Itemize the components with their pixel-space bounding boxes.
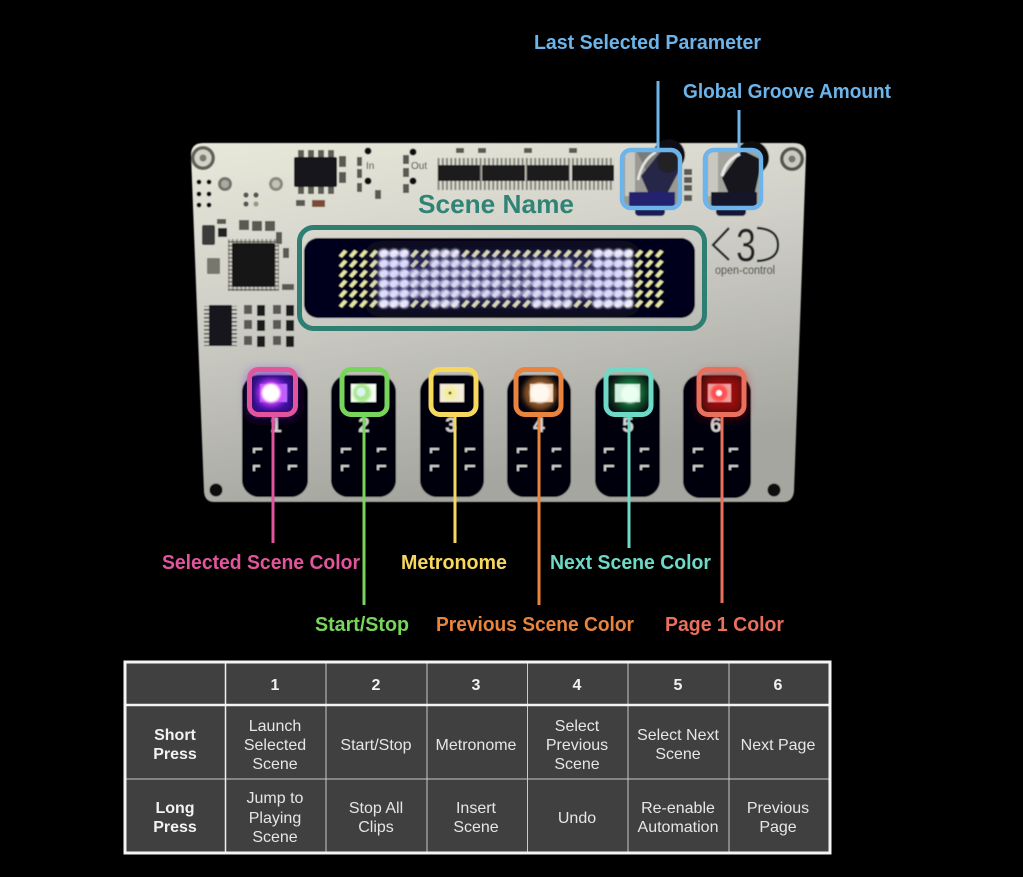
silkscreen labels [366,161,427,172]
label: Previous Scene Color: Previous Scene Color [436,614,634,636]
RGB LEDs [250,373,744,415]
silkscreen labels: In [366,161,374,172]
logo: open-control [713,219,778,277]
circuit board [191,139,806,502]
table row: long press: Automation [638,819,718,836]
table row: short press: Metronome [436,737,517,754]
table row: long press: Scene [453,819,499,836]
table row: short press: Short [154,727,197,744]
label: Next Scene Color: Next Scene Color [550,552,711,574]
button numbers: 3 [445,414,457,437]
table background [125,662,830,853]
logo: open-control: open-control [715,265,775,277]
button numbers: 5 [622,414,634,437]
table grid [125,662,830,853]
highlight: scene name display box [300,228,704,328]
board body [191,143,806,502]
table row: short press: Next Page [741,737,815,754]
callout: button 6 [699,370,744,603]
table row: short press: Launch [249,718,301,735]
button pads [242,375,751,498]
callout: button 3 [431,370,476,543]
label: Last Selected Parameter: Last Selected Parameter [534,32,761,54]
mounting screws and holes [191,146,804,496]
silkscreen labels: Out [411,161,427,172]
table header row: 2 [372,677,381,694]
rotary encoders [622,139,769,216]
button numbers: 4 [533,414,545,437]
table row: short press: Scene [554,756,600,773]
table row: long press: Clips [358,819,394,836]
label: Start/Stop: Start/Stop [315,614,409,636]
table row: short press: Scene [655,746,701,763]
LED matrix display [304,238,695,318]
callout: button 5 [606,370,651,548]
button numbers: 6 [710,414,722,437]
table row: long press: Scene [252,829,298,846]
button numbers: 2 [358,414,370,437]
table row: short press: Start/Stop [340,737,412,754]
table row: long press: Insert [456,800,497,817]
table row: short press: Selected [244,737,306,754]
table row: long press [153,790,809,846]
table row: long press: Stop All [349,800,403,817]
label: Page 1 Color: Page 1 Color [665,614,784,636]
highlight and leader: Global Groove Amount encoder [705,110,761,208]
label: Global Groove Amount: Global Groove Amount [683,81,891,103]
small components [217,148,692,347]
table header row: 6 [774,677,783,694]
table header row: 3 [472,677,481,694]
integrated circuits [202,150,614,346]
button numbers [270,414,722,437]
table row: long press: Page [759,819,797,836]
table row: short press: Select [555,718,600,735]
table row: short press: Press [153,746,197,763]
logo: open-control: 3 [736,219,756,271]
button numbers: 1 [270,414,282,437]
table row: long press: Re-enable [641,800,715,817]
table row: short press: Previous [546,737,608,754]
label: Metronome: Metronome [401,552,507,574]
button function table [125,662,830,853]
switch contact marks [254,449,738,471]
table header row: 5 [674,677,683,694]
table row: long press: Long [155,800,195,817]
table row: long press: Undo [558,810,596,827]
table row: long press: Previous [747,800,809,817]
table header row: 1 [271,677,280,694]
highlight and leader: Last Selected Parameter encoder [622,81,680,208]
callout: button 2 [342,370,387,605]
callout: button 1 [250,370,296,543]
callout: button 4 [516,370,561,605]
table row: long press: Jump to [247,790,304,807]
table row: short press: Scene [252,756,298,773]
heading: Scene Name: Scene Name [418,189,574,219]
table header row: 4 [573,677,582,694]
label: Selected Scene Color: Selected Scene Color [162,552,360,574]
table header row [271,677,783,694]
table row: long press: Press [153,819,197,836]
table row: long press: Playing [249,810,301,827]
table row: short press [153,718,815,773]
table row: short press: Select Next [637,727,719,744]
